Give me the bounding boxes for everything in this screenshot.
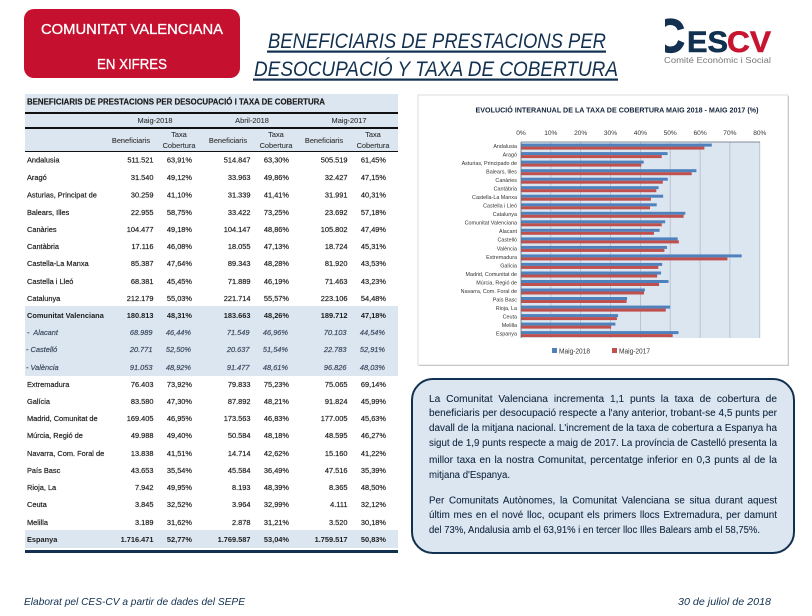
- row: Galícia: Galícia: [27, 397, 51, 406]
- row: Castella-La Manxa: 81.920: [325, 259, 348, 268]
- row: Espanya: 53,04%: [264, 535, 289, 544]
- bars: Múrcia: [521, 280, 668, 286]
- logo: CES-CV: CV: [727, 26, 771, 59]
- row: Aragó: 49,86%: [264, 173, 289, 182]
- row: Canàries: 49,18%: [167, 225, 192, 234]
- row: Balears: 22.955: [131, 208, 154, 217]
- footer: source: Elaborat pel CES-CV a partir de dades del SEPE: [24, 596, 246, 608]
- table bottom rule: [25, 550, 398, 553]
- row: Melilla: 3.520: [329, 518, 348, 527]
- row: Castella-La Manxa: 85.387: [131, 259, 154, 268]
- x axis labels: 0%: [516, 130, 526, 137]
- paragraph 1: beneficiaris per desocupació respecte a l'any anterior, trobant-se 4,5 punts per: [429, 408, 778, 419]
- row: Asturias: 41,10%: [167, 190, 192, 200]
- row: Navarra: 42,62%: [264, 449, 289, 458]
- category labels: País Basc: [493, 297, 517, 303]
- row: Catalunya: 221.714: [224, 294, 250, 303]
- row: Canàries: 47,49%: [361, 225, 386, 234]
- bars: País Basc: [521, 297, 627, 303]
- table header: Beneficiaris: [209, 136, 247, 145]
- x axis labels: [516, 130, 767, 137]
- row: Castella i Lleó: 43,23%: [361, 277, 386, 286]
- row: Navarra: Navarra, Com. Foral de: [27, 449, 104, 458]
- paragraph 1: [429, 394, 778, 481]
- row: Cantàbria: 17.116: [131, 242, 154, 251]
- row: Espanya: [27, 535, 386, 544]
- bars: Castelló: [521, 237, 679, 243]
- footer: date: 30 de juliol de 2018: [678, 596, 771, 608]
- table header: Cobertura: [163, 141, 196, 150]
- row: País Basc: 35,54%: [167, 466, 192, 475]
- row: Rioja: 48,39%: [264, 483, 289, 492]
- row: País Basc: 47.516: [325, 466, 348, 475]
- legend: Maig-2018: [559, 348, 590, 356]
- row: Galícia: 48,21%: [264, 397, 289, 406]
- row: Extremadura: 76.403: [131, 380, 154, 389]
- category labels: Comunitat Valenciana: [465, 221, 517, 227]
- row: País Basc: 36,49%: [264, 466, 289, 475]
- category labels: Cantàbria: [494, 187, 517, 193]
- row: Espanya: Espanya: [27, 535, 58, 544]
- row: València: 48,61%: [263, 363, 288, 372]
- row: Galícia: [27, 397, 386, 406]
- row: Castella-La Manxa: 43,53%: [361, 259, 386, 268]
- row: Ceuta: [27, 500, 386, 509]
- row: Alacant: 70.103: [324, 328, 347, 337]
- row: Cantàbria: 46,08%: [167, 242, 192, 251]
- highlight band: Comunitat Valenciana: [25, 306, 398, 376]
- row: Castella-La Manxa: 48,28%: [264, 259, 289, 268]
- category labels: Madrid, Comunitat de: [465, 272, 517, 278]
- row: Rioja: 8.365: [329, 483, 348, 492]
- category labels: Balears, Illes: [486, 170, 517, 176]
- row: Comunitat Valenciana: 183.663: [224, 311, 250, 320]
- row: Navarra: 14.714: [228, 449, 250, 458]
- row: Múrcia: 49,40%: [167, 431, 192, 440]
- row: Castelló: 51,54%: [263, 345, 288, 354]
- row: Melilla: 2.878: [232, 518, 250, 527]
- row: Cantàbria: 18.724: [325, 242, 348, 251]
- bars: Canàries: [521, 178, 668, 184]
- table header: Abril-2018: [235, 116, 269, 125]
- table header: Beneficiaris: [112, 136, 150, 145]
- row: Rioja: Rioja, La: [27, 483, 57, 492]
- chart title: EVOLUCIÓ INTERANUAL DE LA TAXA DE COBERTURA MAIG 2018 - MAIG 2017 (%): [476, 106, 759, 114]
- category labels: Alacant: [499, 229, 517, 235]
- row: Ceuta: Ceuta: [27, 500, 48, 509]
- row: Canàries: 105.802: [321, 225, 348, 234]
- row: Aragó: 32.427: [325, 173, 348, 182]
- row: Rioja: 7.942: [135, 483, 154, 492]
- row: Castelló: [26, 345, 385, 354]
- category labels: Aragó: [503, 152, 517, 158]
- axis lines: [521, 142, 760, 338]
- row: Madrid: Madrid, Comunitat de: [27, 414, 98, 423]
- row: Ceuta: 3.845: [135, 500, 154, 509]
- row: Madrid: 177.005: [321, 414, 348, 423]
- row: València: 91.053: [130, 363, 153, 372]
- row: Asturias: Asturias, Principat de: [27, 190, 97, 200]
- row: Espanya: 1.759.517: [315, 535, 348, 544]
- row: Múrcia: Múrcia, Regió de: [27, 431, 83, 440]
- bars: Extremadura: [521, 254, 742, 260]
- logo: CES-CV: [664, 18, 772, 63]
- row: Múrcia: 48,18%: [264, 431, 289, 440]
- row: Alacant: 46,44%: [166, 328, 191, 337]
- row: Castelló: 20.637: [226, 345, 250, 354]
- row: Castella i Lleó: 45,45%: [167, 277, 192, 286]
- title: BENEFICIARIS DE PRESTACIONS PER: [268, 30, 606, 53]
- row: Rioja: 49,95%: [167, 483, 192, 492]
- row: Andalusia: [27, 156, 386, 164]
- row: Canàries: 104.147: [224, 225, 250, 234]
- row: Galícia: 87.892: [228, 397, 250, 406]
- row: Comunitat Valenciana: Comunitat Valenciana: [27, 311, 105, 320]
- row: Comunitat Valenciana: 47,18%: [361, 311, 386, 320]
- row: Rioja: [27, 483, 386, 492]
- row: Balears: [27, 208, 386, 217]
- row: Alacant: 44,54%: [360, 328, 385, 337]
- row: Aragó: Aragó: [27, 173, 47, 182]
- row: Galícia: 47,30%: [167, 397, 192, 406]
- category labels: Andalusia: [493, 144, 517, 150]
- row: Galícia: 83.580: [131, 397, 154, 406]
- bars: Catalunya: [521, 212, 685, 218]
- paragraph 1: mitjana d'Espanya.: [429, 470, 510, 481]
- row: Asturias: 30.259: [131, 190, 154, 200]
- row: Melilla: 31,62%: [167, 518, 192, 527]
- row: Extremadura: 73,92%: [167, 380, 192, 389]
- row: País Basc: 35,39%: [361, 466, 386, 475]
- row: Extremadura: 75,23%: [264, 380, 289, 389]
- row: Aragó: 49,12%: [167, 173, 192, 182]
- bars: Ceuta: [521, 314, 618, 320]
- row: Melilla: Melilla: [27, 518, 49, 527]
- row: Aragó: 47,15%: [361, 173, 386, 182]
- row: Castella-La Manxa: 89.343: [228, 259, 250, 268]
- row: Andalusia: 63,91%: [167, 156, 192, 164]
- row: Ceuta: 32,99%: [264, 500, 289, 509]
- row: Aragó: 33.963: [228, 173, 250, 182]
- x axis labels: 60%: [693, 130, 707, 137]
- row: Castella i Lleó: 68.381: [131, 277, 154, 286]
- row: Extremadura: [27, 380, 386, 389]
- table header: Beneficiaris: [305, 136, 343, 145]
- row: Castelló: 20.771: [129, 345, 152, 354]
- row: Galícia: 91.824: [325, 397, 348, 406]
- paragraph 1: sigut de 1,9 punts respecte a maig de 2017. La província de Castelló presenta la: [429, 438, 777, 449]
- paragraph 1: millor taxa en la nostra Comunitat, percentatge inferior en 0,3 punts al de la: [429, 455, 777, 466]
- paragraph 1: La Comunitat Valenciana incrementa 1,1 punts la taxa de cobertura de: [429, 394, 777, 405]
- bars: València: [521, 246, 667, 252]
- row: Catalunya: 212.179: [127, 294, 154, 303]
- row: Espanya: 1.716.471: [121, 535, 154, 544]
- row: Balears: 58,75%: [167, 208, 192, 217]
- row: Comunitat Valenciana: [27, 311, 386, 320]
- row: Comunitat Valenciana: 189.712: [321, 311, 348, 320]
- bars: Castella-La Manxa: [521, 195, 663, 201]
- row: Melilla: 30,18%: [361, 518, 386, 527]
- paragraph 2: últim mes en el nové lloc, ocupant els primers llocs Extremadura, per damunt: [429, 510, 777, 521]
- bars: Navarra: [521, 288, 645, 294]
- row: Ceuta: 32,52%: [167, 500, 192, 509]
- table header: Cobertura: [260, 141, 293, 150]
- plot area: [521, 142, 760, 338]
- category labels: Galícia: [500, 263, 517, 269]
- row: València: 48,03%: [360, 363, 385, 372]
- row: Andalusia: 511.521: [127, 156, 154, 164]
- row: Andalusia: Andalusia: [27, 156, 60, 164]
- panel: commentary box: [412, 379, 794, 553]
- row: Rioja: 8.193: [232, 483, 250, 492]
- table header: Maig-2018: [138, 116, 172, 125]
- row: Castella-La Manxa: Castella-La Manxa: [27, 259, 90, 268]
- x axis labels: 50%: [664, 130, 677, 137]
- category labels: València: [497, 246, 517, 252]
- row: País Basc: 45.584: [228, 466, 250, 475]
- row: Cantàbria: 45,31%: [361, 242, 386, 251]
- row: Castelló: 52,50%: [166, 345, 191, 354]
- category labels: Asturias, Principado de: [462, 161, 517, 167]
- row: Alacant: 68.989: [130, 328, 152, 337]
- row: Múrcia: 48.595: [325, 431, 348, 440]
- row: Melilla: 3.189: [135, 518, 154, 527]
- panel: red header badge: EN XIFRES: [97, 57, 167, 73]
- row: Madrid: [27, 414, 386, 423]
- category labels: Espanya: [496, 332, 517, 338]
- table header: Taxa: [268, 130, 285, 139]
- panel: data table: [25, 94, 398, 553]
- bars: Espanya: [521, 331, 678, 337]
- row: País Basc: 43.653: [131, 466, 154, 475]
- row: Comunitat Valenciana: 180.813: [127, 311, 154, 320]
- bars: Asturias: [521, 161, 644, 167]
- row: Castella-La Manxa: 47,64%: [167, 259, 192, 268]
- category labels: Castelló: [498, 238, 517, 244]
- row: País Basc: País Basc: [27, 466, 61, 475]
- logo: CES-CV: C: [654, 9, 685, 62]
- row: Castella i Lleó: 71.889: [228, 277, 250, 286]
- bars: Madrid: [521, 272, 661, 278]
- row: Comunitat Valenciana: 48,31%: [167, 311, 192, 320]
- row: Navarra: 15.160: [325, 449, 348, 458]
- row: Cantàbria: 47,13%: [264, 242, 289, 251]
- row: Extremadura: 79.833: [228, 380, 250, 389]
- row: Canàries: [27, 225, 386, 234]
- row: Múrcia: 46,27%: [361, 431, 386, 440]
- row: Ceuta: 3.964: [232, 500, 250, 509]
- row: València: 96.826: [324, 363, 347, 372]
- row: Aragó: 31.540: [131, 173, 154, 182]
- row: Andalusia: 514.847: [224, 156, 250, 164]
- row: Melilla: [27, 518, 386, 527]
- table title: [25, 94, 398, 112]
- row: València: 91.477: [227, 363, 250, 372]
- highlight band: Espanya: [25, 530, 398, 548]
- row: València: - València: [26, 363, 59, 372]
- row: Comunitat Valenciana: 48,26%: [264, 311, 289, 320]
- row: Cantàbria: 18.055: [228, 242, 250, 251]
- row: Andalusia: 505.519: [321, 156, 348, 164]
- category labels: Castella i Lleó: [483, 204, 517, 210]
- row: Cantàbria: Cantàbria: [27, 242, 60, 251]
- category labels: Extremadura: [486, 255, 517, 261]
- row: València: [26, 363, 385, 372]
- row: Madrid: 46,95%: [167, 414, 192, 423]
- row: Aragó: [27, 173, 386, 182]
- row: Canàries: 104.477: [127, 225, 154, 234]
- row: Catalunya: 55,03%: [167, 294, 192, 303]
- row: Balears: Balears, Illes: [27, 208, 70, 217]
- category labels: Catalunya: [493, 212, 517, 218]
- category labels: Múrcia, Regió de: [476, 280, 517, 286]
- row: Navarra: 13.838: [131, 449, 154, 458]
- row: Espanya: 52,77%: [167, 535, 192, 544]
- row: Extremadura: 69,14%: [361, 380, 386, 389]
- paragraph 1: davall de la mitjana nacional. L'increment de la taxa de cobertura a Espanya ha: [429, 423, 777, 434]
- row: Castella i Lleó: Castella i Lleó: [27, 277, 73, 286]
- panel: red header badge: COMUNITAT VALENCIANA: [41, 22, 223, 38]
- row: Galícia: 45,99%: [361, 397, 386, 406]
- bars: Alacant: [521, 229, 660, 235]
- row: Madrid: 169.405: [127, 414, 154, 423]
- row: Alacant: 46,96%: [263, 328, 288, 337]
- row: Múrcia: 49.988: [131, 431, 154, 440]
- row: Extremadura: 75.065: [325, 380, 348, 389]
- category labels: Ceuta: [503, 314, 517, 320]
- row: Asturias: 40,31%: [361, 190, 386, 200]
- paragraph 2: del 73%, Andalusia amb el 63,91% i en tercer lloc Illes Balears amb el 58,75%.: [429, 525, 760, 536]
- category labels: Melilla: [502, 323, 517, 329]
- bars: Aragó: [521, 152, 668, 158]
- category labels: [461, 144, 517, 338]
- table header: Maig-2017: [332, 116, 366, 125]
- row: Catalunya: [27, 294, 386, 303]
- category labels: Rioja, La: [496, 306, 517, 312]
- row: Rioja: 48,50%: [361, 483, 386, 492]
- table header: Taxa: [365, 130, 382, 139]
- logo: CES-CV: Comité Econòmic i Social: [664, 55, 771, 65]
- bars: Balears: [521, 169, 696, 175]
- row: Navarra: 41,51%: [167, 449, 192, 458]
- row: Navarra: [27, 449, 386, 458]
- paragraph 2: [429, 496, 777, 536]
- row: Catalunya: 55,57%: [264, 294, 289, 303]
- bars: Andalusia: [521, 144, 712, 150]
- legend: Maig-2017: [619, 348, 650, 356]
- row: Canàries: 48,86%: [264, 225, 289, 234]
- row: Madrid: 46,83%: [264, 414, 289, 423]
- row: Catalunya: Catalunya: [27, 294, 61, 303]
- row: Castella-La Manxa: [27, 259, 386, 268]
- category labels: Navarra, Com. Foral de: [461, 289, 517, 295]
- row: Balears: 23.692: [325, 208, 348, 217]
- row: Asturias: [27, 190, 386, 200]
- row: Múrcia: [27, 431, 386, 440]
- row: Balears: 57,18%: [361, 208, 386, 217]
- x axis labels: 10%: [544, 130, 558, 137]
- bars: Castella i Lleó: [521, 203, 657, 209]
- row: Balears: 33.422: [228, 208, 250, 217]
- row: Catalunya: 54,48%: [361, 294, 386, 303]
- row: Alacant: [27, 328, 385, 337]
- row: Alacant: - Alacant: [27, 328, 59, 337]
- row: Melilla: 31,21%: [264, 518, 289, 527]
- legend: [552, 348, 650, 356]
- bars: Rioja: [521, 306, 670, 312]
- row: Alacant: 71.549: [227, 328, 250, 337]
- row: Espanya: 50,83%: [361, 535, 386, 544]
- row: València: 48,92%: [166, 363, 191, 372]
- table header: Taxa: [171, 130, 188, 139]
- row: Múrcia: 50.584: [228, 431, 250, 440]
- row: Andalusia: 61,45%: [361, 156, 386, 164]
- row: Castelló: - Castelló: [26, 345, 57, 354]
- row: Madrid: 45,63%: [361, 414, 386, 423]
- row: Asturias: 31.991: [325, 190, 348, 200]
- row: Andalusia: 63,30%: [264, 156, 289, 164]
- x axis labels: 70%: [723, 130, 737, 137]
- row: Espanya: 1.769.587: [218, 535, 250, 544]
- x axis labels: 30%: [604, 130, 617, 137]
- bars: Comunitat Valenciana: [521, 220, 665, 226]
- table header: [25, 112, 398, 152]
- paragraph 2: Per Comunitats Autònomes, la Comunitat Valenciana se situa durant aquest: [429, 496, 777, 506]
- row: Castella i Lleó: 71.463: [325, 277, 348, 286]
- row: Navarra: 41,22%: [361, 449, 386, 458]
- table header: Cobertura: [357, 141, 390, 150]
- row: Asturias: 31.339: [228, 190, 250, 200]
- row: Castella i Lleó: 46,19%: [264, 277, 289, 286]
- row: Canàries: Canàries: [27, 225, 57, 234]
- panel: bar chart: [418, 95, 789, 366]
- title: DESOCUPACIÓ Y TAXA DE COBERTURA: [254, 58, 618, 81]
- bars: Melilla: [521, 323, 615, 329]
- row: Asturias: 41,41%: [264, 190, 289, 200]
- title: [253, 30, 618, 81]
- category labels: Castella-La Manxa: [472, 195, 517, 201]
- bars: Galícia: [521, 263, 662, 269]
- row: Castelló: 52,91%: [360, 345, 385, 354]
- x axis labels: 40%: [634, 130, 647, 137]
- row: Cantàbria: [27, 242, 386, 251]
- row: Catalunya: 223.106: [321, 294, 348, 303]
- panel: red header badge: [24, 9, 240, 78]
- row: País Basc: [27, 466, 386, 475]
- row: Madrid: 173.563: [224, 414, 250, 423]
- x axis labels: 80%: [753, 130, 767, 137]
- bars: Cantàbria: [521, 186, 659, 192]
- row: Ceuta: 32,12%: [361, 500, 386, 509]
- row: Balears: 73,25%: [264, 208, 289, 217]
- x axis labels: 20%: [574, 130, 587, 137]
- logo: CES-CV: ES: [687, 26, 728, 59]
- row: Castelló: 22.783: [323, 345, 347, 354]
- table title: BENEFICIARIS DE PRESTACIONS PER DESOCUPACIÓ I TAXA DE COBERTURA: [27, 98, 325, 106]
- row: Castella i Lleó: [27, 277, 386, 286]
- category labels: Canàries: [495, 178, 517, 184]
- row: Ceuta: 4.111: [330, 500, 348, 509]
- row: Extremadura: Extremadura: [27, 380, 70, 389]
